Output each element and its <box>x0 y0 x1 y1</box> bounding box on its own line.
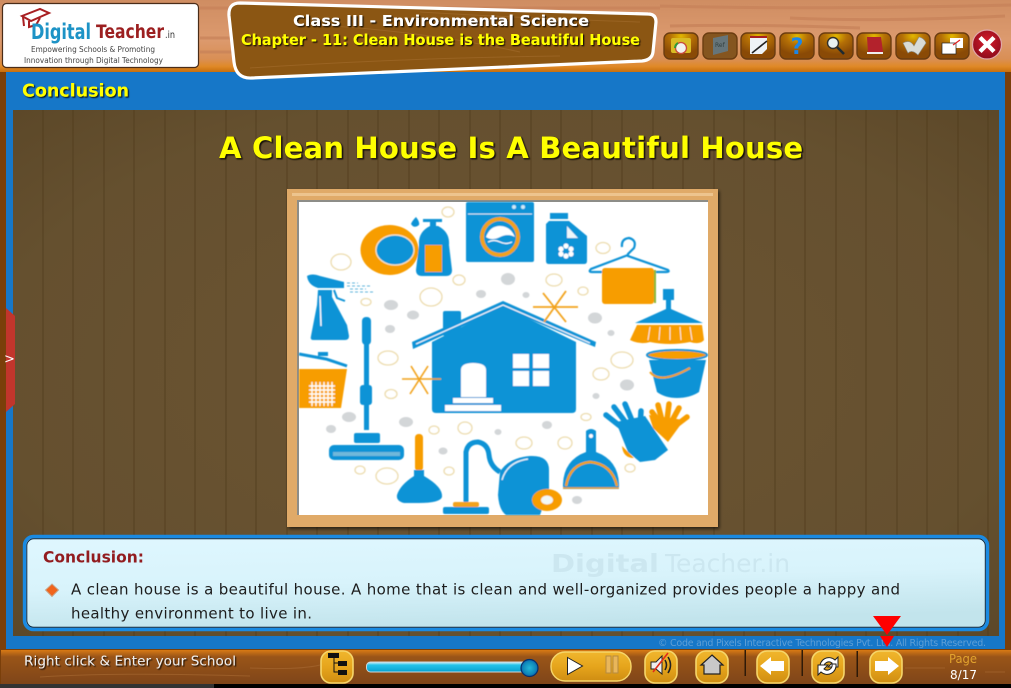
copyright note: © Code and Pixels Interactive Technologies Pvt. Ltd. All Rights Reserved. <box>658 638 986 649</box>
watermark: Digital <box>551 549 659 578</box>
left side slide tab <box>4 308 15 412</box>
logo wordmark: Digital <box>31 20 91 44</box>
button: reference book <box>703 33 737 59</box>
button: next page <box>870 651 902 683</box>
callout heading: Conclusion: <box>43 548 144 566</box>
conclusion callout box <box>24 536 988 630</box>
button: reload <box>812 651 844 683</box>
button: dictionary <box>857 33 891 59</box>
school prompt: Right click & Enter your School <box>24 654 236 670</box>
divider <box>856 651 858 677</box>
icon: broom <box>630 289 704 344</box>
left side slide tab: > <box>4 352 15 367</box>
button: magnifier <box>819 33 853 59</box>
icon: plunger <box>397 434 442 503</box>
callout body text: healthy environment to live in. <box>71 604 312 622</box>
progress slider <box>366 660 538 676</box>
chapter heading: Chapter - 11: Clean House is the Beautiful House <box>241 31 640 49</box>
icon: vacuum cleaner <box>443 442 562 515</box>
picture frame <box>287 189 718 527</box>
logo wordmark: Teacher <box>96 21 165 43</box>
button: previous page <box>757 651 789 683</box>
watermark: Teacher.in <box>664 549 790 578</box>
icon: detergent jug <box>546 213 587 264</box>
icon: clothes hanger with towel <box>590 238 669 304</box>
logo wordmark: .in <box>165 30 175 41</box>
icon: house <box>412 301 596 413</box>
page number: 8/17 <box>950 667 977 682</box>
icon: soap bottle <box>411 217 452 276</box>
top wooden header band <box>0 0 1011 72</box>
divider <box>802 650 803 676</box>
icon: bucket <box>647 350 707 398</box>
illustration: cleaning tools around a house <box>299 202 707 515</box>
bubbles <box>331 207 635 484</box>
bullet diamond <box>46 584 58 596</box>
icon: plate <box>360 225 418 275</box>
divider <box>744 650 746 676</box>
bottom control bar <box>0 650 1011 688</box>
button: help <box>780 33 814 60</box>
button: close <box>972 30 1002 59</box>
button: contents tree <box>321 651 353 683</box>
button: reference book: Ref <box>715 42 726 49</box>
icon: sparkle stars <box>402 291 578 394</box>
class heading: Class III - Environmental Science <box>293 12 589 30</box>
button: home <box>696 651 728 683</box>
button: notepad <box>741 33 775 59</box>
icon: graduation cap <box>22 9 49 27</box>
icon: dustpan <box>563 429 619 489</box>
framed picture <box>287 189 718 527</box>
icon: red pointer arrow <box>873 616 901 647</box>
page label: Page <box>949 651 977 666</box>
button: resize window <box>935 33 969 59</box>
button: sound muted <box>645 651 677 683</box>
main title: A Clean House Is A Beautiful House <box>219 131 803 165</box>
toolbar buttons <box>664 30 1002 60</box>
button: open book <box>896 33 930 59</box>
icon: spray bottle <box>307 274 375 340</box>
callout body text: A clean house is a beautiful house. A home that is clean and well-organized provides people a happy and <box>71 580 900 598</box>
icon: mop <box>329 317 404 460</box>
logo card <box>2 4 198 68</box>
icon: washing machine <box>466 202 534 262</box>
grey dots <box>326 273 634 504</box>
section heading: Conclusion <box>22 82 129 102</box>
chapter title plaque <box>229 3 656 78</box>
play and pause buttons <box>551 652 631 681</box>
icon: rubber gloves <box>606 404 687 462</box>
button: help: ? <box>791 35 803 60</box>
button: clock folder <box>664 33 698 59</box>
logo tagline: Innovation through Digital Technology <box>24 55 163 65</box>
logo tagline: Empowering Schools & Promoting <box>31 44 155 54</box>
wood plank panel <box>13 110 999 636</box>
icon: laundry basket <box>299 352 347 408</box>
